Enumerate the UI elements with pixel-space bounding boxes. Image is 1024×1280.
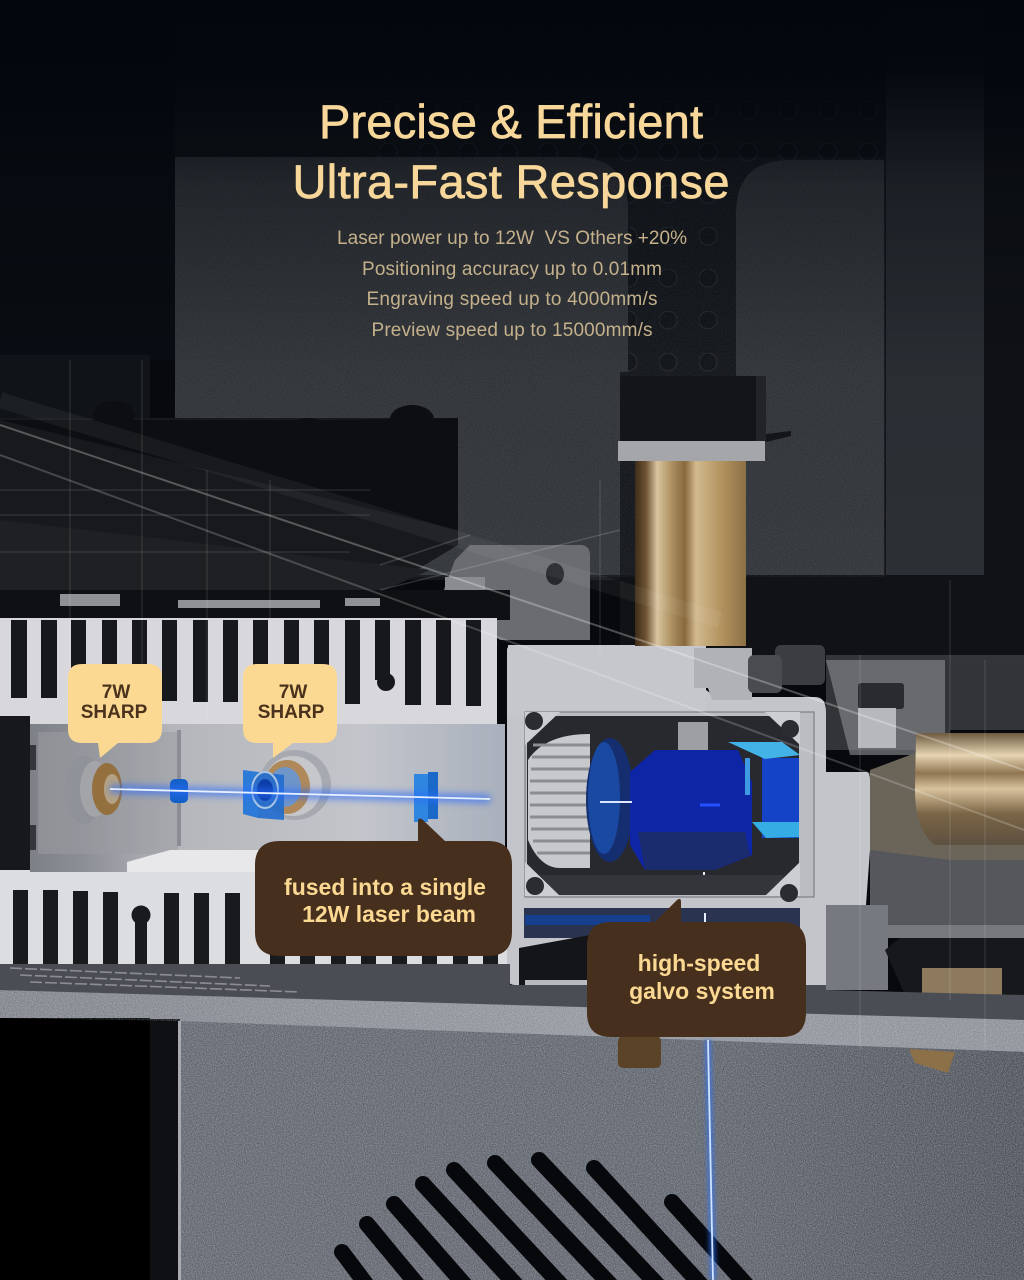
table: light edge strip — [0, 990, 1024, 1052]
panel: black cooling block — [0, 355, 458, 592]
brass peg right — [909, 1049, 955, 1073]
spec list — [337, 228, 687, 341]
galvo frame corners and screw holes — [525, 712, 800, 902]
box: laser combining chamber — [0, 716, 505, 872]
lower left dark area — [0, 1018, 181, 1280]
callout: 7W SHARP right — [243, 664, 337, 758]
optic: blue prism — [414, 772, 438, 822]
callout: 7W SHARP right: 7W — [279, 682, 307, 703]
nozzle: black cap — [620, 376, 791, 442]
title — [292, 95, 730, 208]
vent slots — [323, 1160, 760, 1280]
callout: high-speed galvo system: galvo system — [629, 978, 775, 1004]
spec list: Positioning accuracy up to 0.01mm — [362, 259, 662, 280]
right side: translucent mount and brass part — [748, 645, 1024, 996]
galvo housing — [507, 645, 870, 985]
texture: grain on table and lower plate — [0, 990, 1024, 1280]
heatsink: bottom fins — [0, 868, 510, 978]
nozzle: brass cylinder — [635, 461, 746, 646]
callout: high-speed galvo system: high-speed — [638, 950, 760, 976]
table: dark upper surface — [0, 964, 1024, 1022]
callout: fused into a single 12W laser beam: 12W laser beam — [302, 901, 476, 927]
table: perforated lines — [10, 968, 300, 992]
brass peg left — [618, 1036, 661, 1068]
panel: rear grey plate right — [736, 160, 884, 575]
callout: 7W SHARP left — [68, 664, 162, 758]
laser emitter: right diode with mirror — [243, 750, 331, 820]
bracket: mounting plate — [440, 545, 590, 640]
laser emitter: left diode — [65, 756, 122, 824]
callout: fused into a single 12W laser beam — [255, 818, 512, 956]
spec list: Engraving speed up to 4000mm/s — [366, 289, 658, 310]
heatsink: top fins — [0, 590, 510, 727]
optic: small blue lens — [170, 779, 188, 803]
lower plate — [180, 1021, 1024, 1280]
panel: rear grey plate left — [175, 157, 628, 575]
title: Ultra-Fast Response — [292, 155, 730, 208]
spec list: Laser power up to 12W VS Others +20% — [337, 228, 687, 249]
nozzle: silver ring — [618, 441, 765, 461]
callout: 7W SHARP left: SHARP — [81, 702, 148, 723]
texture: grain on rear plates — [175, 157, 885, 577]
callout: high-speed galvo system — [587, 899, 806, 1037]
title: Precise & Efficient — [319, 95, 703, 148]
galvo lower slot — [519, 908, 805, 996]
spec list: Preview speed up to 15000mm/s — [372, 320, 652, 341]
galvo window: blue mirror assembly — [525, 712, 805, 902]
overlay: dark top fade — [0, 0, 1024, 620]
overlay: translucent glass lines — [0, 360, 1024, 1050]
laser beam: vertical output — [708, 1040, 713, 1280]
laser beam: horizontal blue beam — [110, 789, 490, 799]
callout: 7W SHARP right: SHARP — [258, 702, 325, 723]
callout: fused into a single 12W laser beam: fused into a single — [284, 874, 486, 900]
callout: 7W SHARP left: 7W — [102, 682, 130, 703]
